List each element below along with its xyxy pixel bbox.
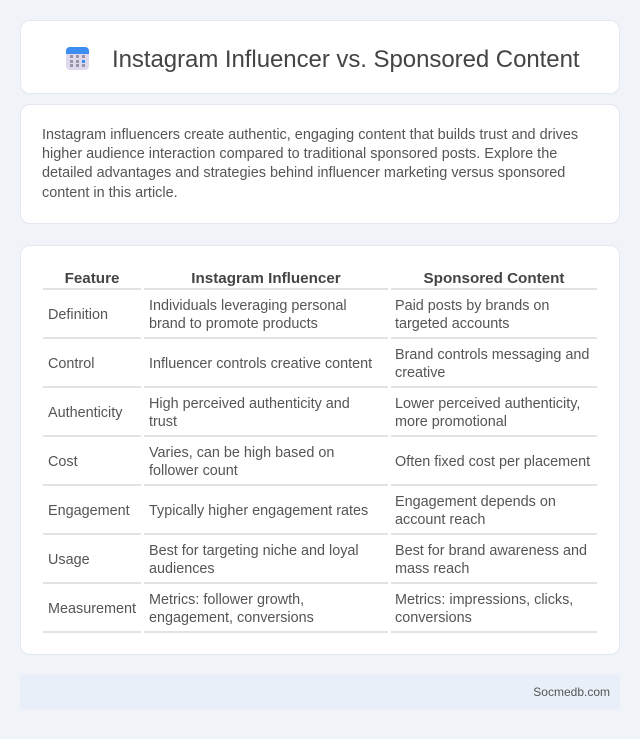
text: intro line 4: content in this article. (42, 185, 178, 201)
panel: introduction (20, 104, 620, 224)
row: Engagement: Engagement depends on (395, 494, 556, 510)
text: intro line 1: Instagram influencers create authentic, engaging content that builds trust and drives (42, 127, 578, 143)
text: intro line 3: detailed advantages and strategies behind influencer marketing versus sponsored (42, 165, 565, 181)
row: Cost: follower count (149, 463, 238, 479)
row: Engagement: Typically higher engagement rates (149, 503, 368, 519)
row: Usage: mass reach (395, 561, 469, 577)
row: Definition: Individuals leveraging personal (149, 298, 347, 314)
panel: title card (20, 20, 620, 94)
row: Measurement: conversions (395, 610, 472, 626)
row: Authenticity: Authenticity (48, 405, 122, 421)
row: Engagement: account reach (395, 512, 485, 528)
row: Measurement: Measurement (48, 601, 136, 617)
row: Measurement (48, 592, 573, 626)
row: Cost: Varies, can be high based on (149, 445, 334, 461)
text: intro line 2: higher audience interaction compared to traditional sponsored posts. Explore the (42, 146, 557, 162)
row: Control: Control (48, 356, 94, 372)
row: Cost: Cost (48, 454, 78, 470)
row: Usage: audiences (149, 561, 215, 577)
footer (20, 675, 620, 709)
row: Control (48, 347, 589, 381)
row: Authenticity: Lower perceived authenticity, (395, 396, 580, 412)
panel: comparison table (20, 245, 620, 655)
row: Authenticity: trust (149, 414, 177, 430)
row: Control: Brand controls messaging and (395, 347, 589, 363)
row: Measurement: Metrics: impressions, clicks, (395, 592, 573, 608)
row: Control: creative (395, 365, 445, 381)
table header (65, 270, 564, 287)
title: Instagram Influencer vs. Sponsored Content (112, 46, 580, 73)
row: Definition: Definition (48, 307, 108, 323)
table header: Sponsored Content (424, 270, 564, 287)
row: Measurement: Metrics: follower growth, (149, 592, 304, 608)
table header: Feature (65, 270, 119, 287)
row: Definition: targeted accounts (395, 316, 509, 332)
row: Usage: Usage (48, 552, 90, 568)
row: Engagement: Engagement (48, 503, 130, 519)
row: Cost (48, 445, 590, 479)
table header: Instagram Influencer (191, 270, 341, 287)
icon: calendar (66, 47, 89, 70)
footer text: Socmedb.com (533, 685, 610, 699)
row: Cost: Often fixed cost per placement (395, 454, 590, 470)
row: Usage: Best for targeting niche and loyal (149, 543, 359, 559)
row: Engagement (48, 494, 556, 528)
row: Definition: brand to promote products (149, 316, 318, 332)
row: Usage: Best for brand awareness and (395, 543, 587, 559)
row: Definition (48, 298, 549, 332)
row: Authenticity (48, 396, 580, 430)
row: Usage (48, 543, 587, 577)
row: Authenticity: High perceived authenticity and (149, 396, 350, 412)
row: Definition: Paid posts by brands on (395, 298, 549, 314)
row: Control: Influencer controls creative content (149, 356, 372, 372)
row: Authenticity: more promotional (395, 414, 507, 430)
row: Measurement: engagement, conversions (149, 610, 314, 626)
